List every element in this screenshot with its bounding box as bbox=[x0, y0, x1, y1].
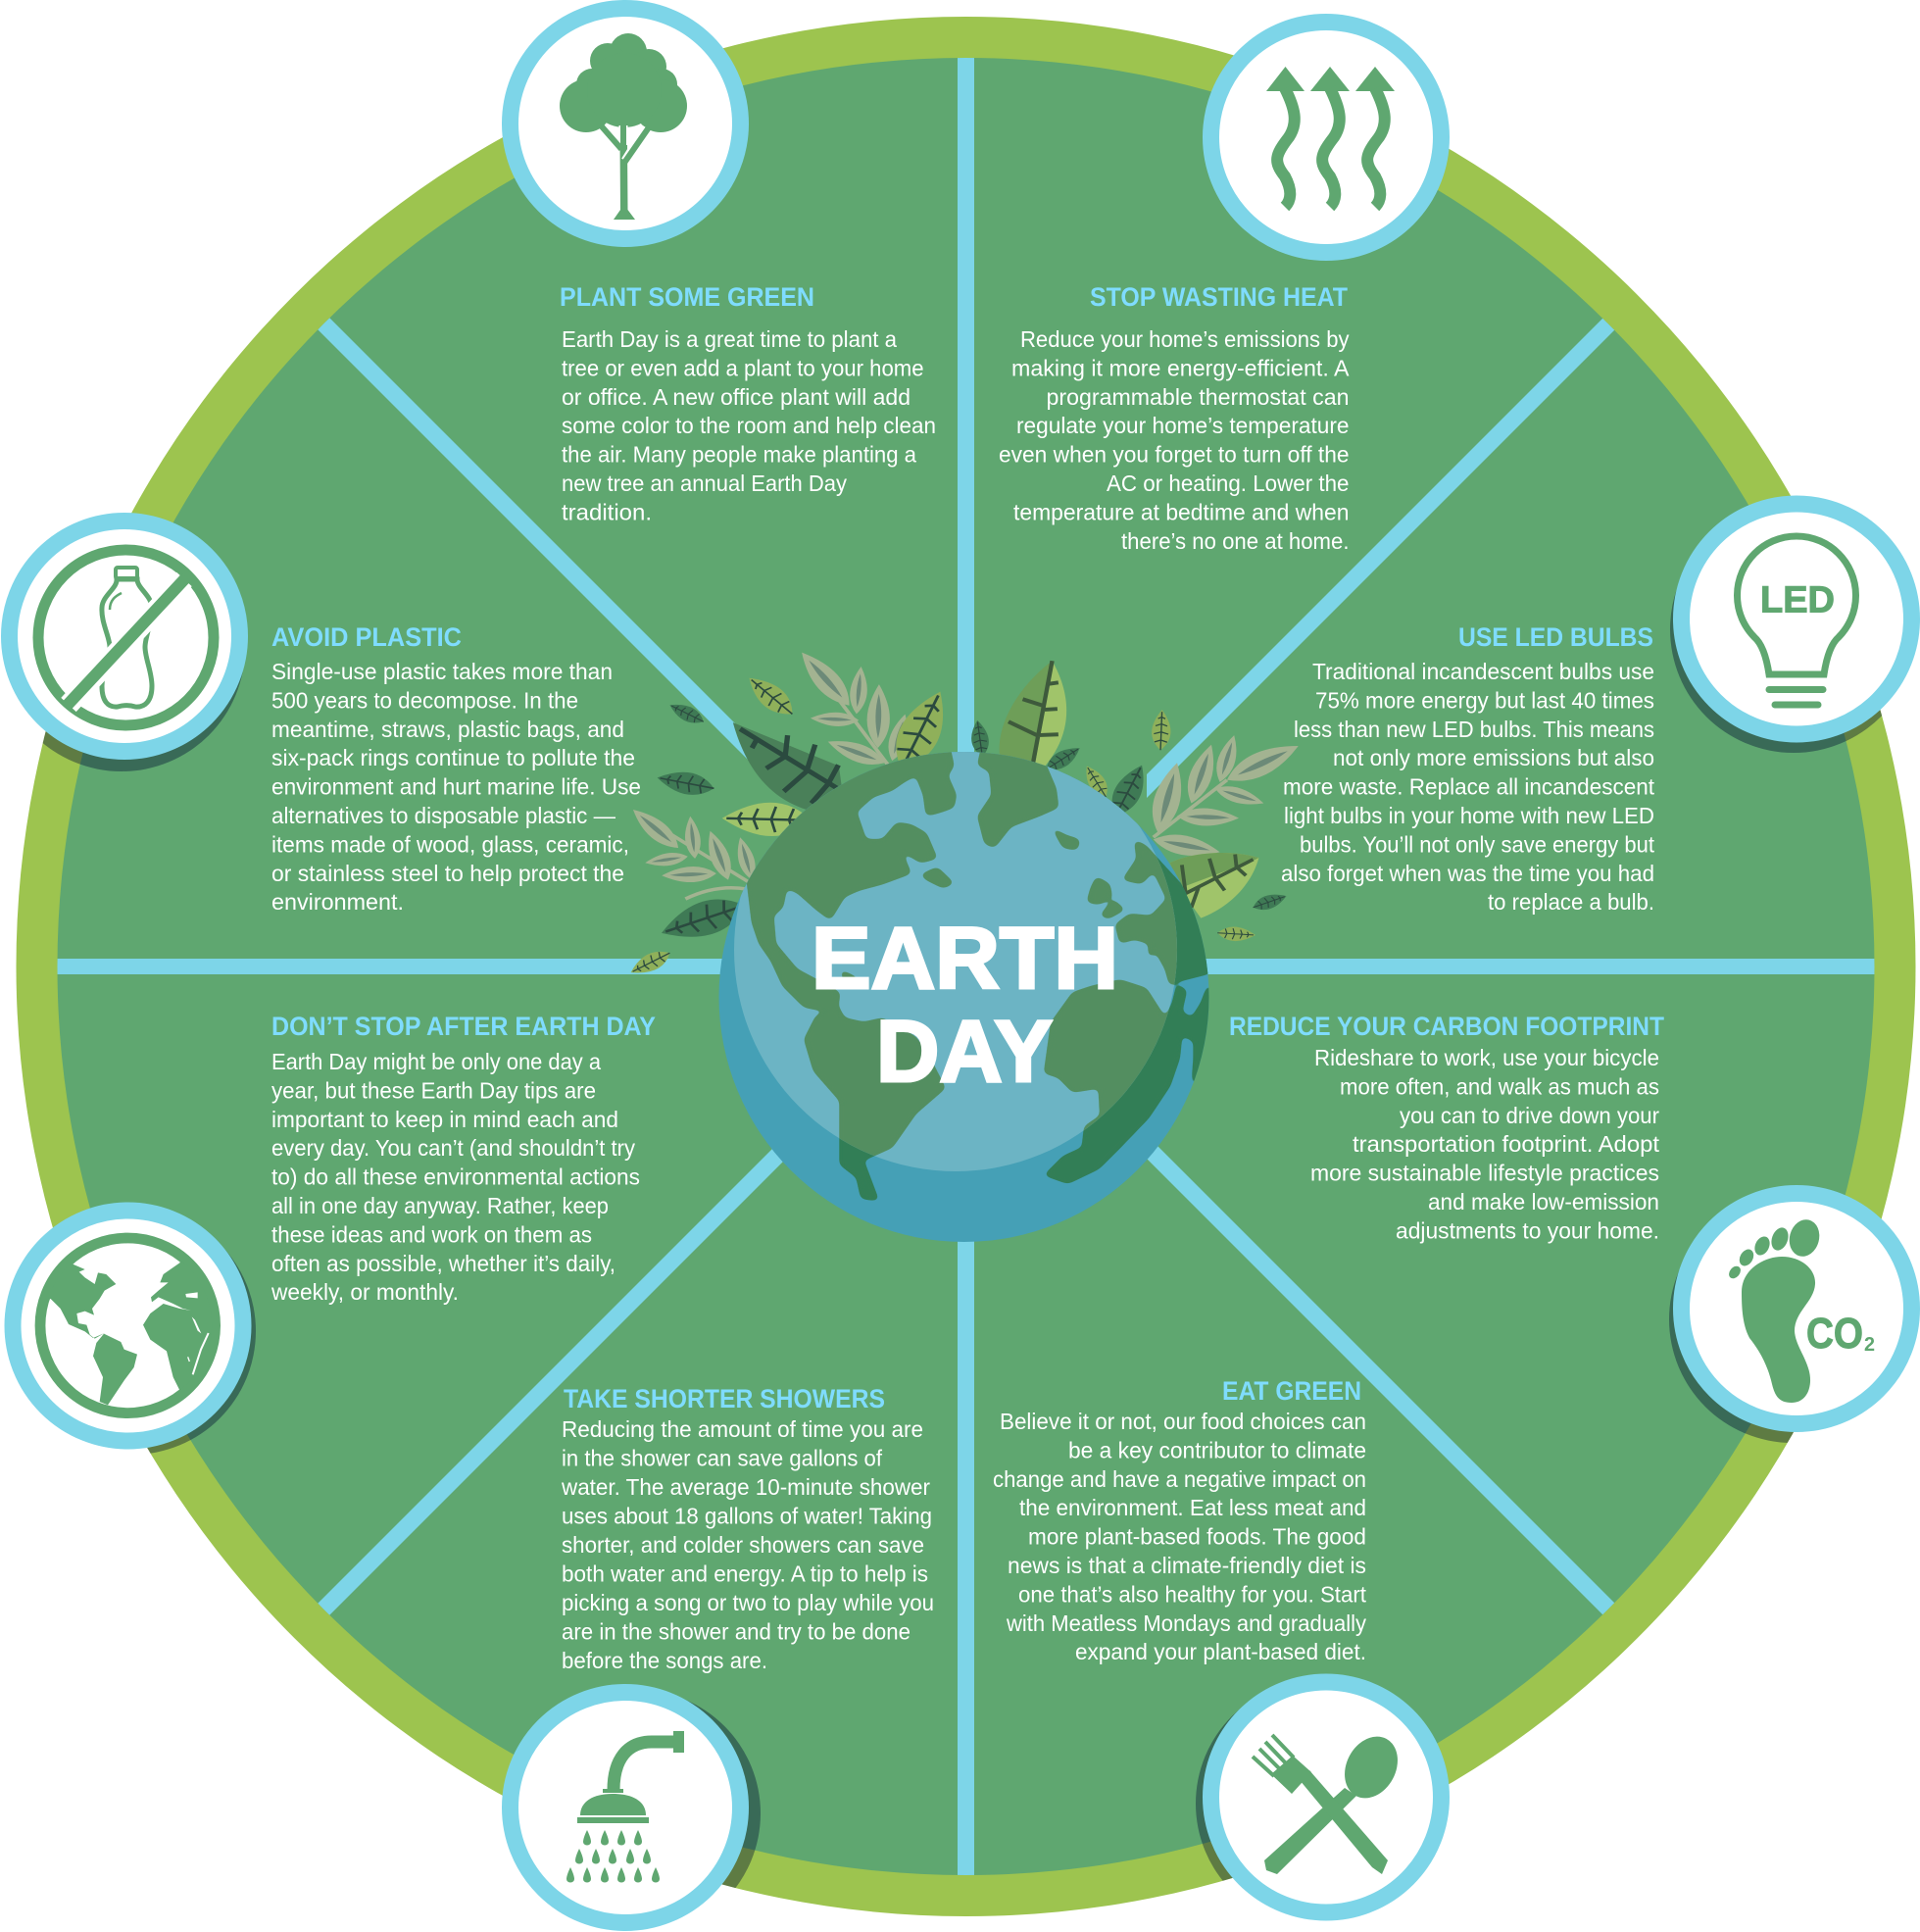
body text: new tree an annual Earth Day bbox=[562, 471, 847, 496]
panel: eat green bbox=[993, 1376, 1367, 1664]
body text: the air. Many people make planting a bbox=[562, 442, 916, 468]
body text: regulate your home’s temperature bbox=[1016, 413, 1349, 438]
icon: CO2 footprint: CO bbox=[1806, 1310, 1863, 1358]
body text: there’s no one at home. bbox=[1121, 528, 1349, 554]
body text bbox=[271, 659, 641, 915]
body text: Traditional incandescent bulbs use bbox=[1312, 659, 1654, 684]
body text: also forget when was the time you had bbox=[1281, 861, 1654, 886]
heading: DON’T STOP AFTER EARTH DAY bbox=[271, 1012, 656, 1041]
body text: Reducing the amount of time you are bbox=[562, 1416, 923, 1442]
light upper hemisphere bbox=[734, 752, 1177, 1171]
body text: more sustainable lifestyle practices bbox=[1310, 1161, 1659, 1186]
panel: reduce your carbon footprint bbox=[1229, 1012, 1664, 1243]
body text: AC or heating. Lower the bbox=[1107, 471, 1349, 496]
title: EARTH DAY: DAY bbox=[876, 1002, 1053, 1100]
icon: no plastic bottle bbox=[10, 521, 239, 751]
leaf branch: lower left bbox=[626, 803, 760, 899]
body text: alternatives to disposable plastic — bbox=[271, 803, 615, 828]
africa and eurasia bbox=[143, 1263, 210, 1390]
body text: every day. You can’t (and shouldn’t try bbox=[271, 1135, 635, 1161]
body text: even when you forget to turn off the bbox=[999, 442, 1349, 468]
body text: programmable thermostat can bbox=[1047, 384, 1349, 410]
leaves behind the globe bbox=[626, 646, 1305, 980]
body text: Rideshare to work, use your bicycle bbox=[1314, 1045, 1659, 1070]
icon: rising heat arrows bbox=[1211, 22, 1441, 253]
body text: in the shower can save gallons of bbox=[562, 1445, 883, 1470]
americas bbox=[50, 1264, 116, 1339]
body text: all in one day anyway. Rather, keep bbox=[271, 1193, 609, 1218]
heading: EAT GREEN bbox=[1222, 1376, 1361, 1406]
body text: uses about 18 gallons of water! Taking bbox=[562, 1504, 932, 1529]
body text: bulbs. You’ll not only save energy but bbox=[1300, 831, 1655, 857]
body text: to replace a bulb. bbox=[1488, 889, 1654, 915]
body text: not only more emissions but also bbox=[1333, 745, 1654, 770]
body text: picking a song or two to play while you bbox=[562, 1590, 934, 1615]
leaf branch: right bbox=[1146, 733, 1305, 862]
body text: these ideas and work on them as bbox=[271, 1221, 592, 1247]
body text: and make low-emission bbox=[1428, 1189, 1659, 1214]
body text: be a key contributor to climate bbox=[1068, 1437, 1366, 1462]
body text: tree or even add a plant to your home bbox=[562, 355, 924, 380]
central earth globe bbox=[715, 725, 1220, 1242]
icon: LED bulb: LED bbox=[1760, 580, 1835, 621]
title: EARTH DAY: EARTH bbox=[812, 909, 1118, 1007]
panel: plant some green bbox=[560, 282, 936, 524]
body text: with Meatless Mondays and gradually bbox=[1006, 1610, 1366, 1636]
body text: before the songs are. bbox=[562, 1648, 767, 1673]
body text: environment. bbox=[271, 889, 404, 915]
body text: year, but these Earth Day tips are bbox=[271, 1077, 596, 1103]
body text: adjustments to your home. bbox=[1396, 1217, 1659, 1243]
body text: 75% more energy but last 40 times bbox=[1315, 687, 1654, 713]
body text: light bulbs in your home with new LED bbox=[1284, 803, 1654, 828]
body text: one that’s also healthy for you. Start bbox=[1018, 1581, 1367, 1607]
panel: avoid plastic bbox=[271, 622, 641, 915]
body text: important to keep in mind each and bbox=[271, 1107, 618, 1132]
body text: the environment. Eat less meat and bbox=[1019, 1495, 1366, 1520]
heading: AVOID PLASTIC bbox=[271, 622, 462, 652]
body text: news is that a climate-friendly diet is bbox=[1008, 1553, 1366, 1578]
body text bbox=[999, 326, 1350, 554]
panel: take shorter showers bbox=[561, 1384, 934, 1673]
body text: items made of wood, glass, ceramic, bbox=[271, 831, 629, 857]
body text: are in the shower and try to be done bbox=[562, 1619, 911, 1645]
icon: fork and spoon bbox=[1211, 1682, 1441, 1912]
heading: STOP WASTING HEAT bbox=[1090, 282, 1348, 312]
body text: environment and hurt marine life. Use bbox=[271, 774, 641, 800]
body text bbox=[993, 1409, 1367, 1664]
icon: world globe bbox=[13, 1211, 243, 1441]
body text: meantime, straws, plastic bags, and bbox=[271, 717, 624, 742]
icon: CO2 footprint: 2 bbox=[1864, 1334, 1875, 1356]
body text: 500 years to decompose. In the bbox=[271, 687, 578, 713]
body text: weekly, or monthly. bbox=[271, 1279, 459, 1305]
body text bbox=[1310, 1045, 1660, 1243]
body text: tradition. bbox=[562, 499, 652, 524]
heading: USE LED BULBS bbox=[1458, 622, 1653, 652]
body text: less than new LED bulbs. This means bbox=[1294, 717, 1654, 742]
panel: use LED bulbs bbox=[1281, 622, 1655, 915]
body text bbox=[561, 1416, 934, 1673]
body text: you can to drive down your bbox=[1400, 1103, 1659, 1128]
body text: making it more energy-efficient. A bbox=[1011, 355, 1350, 380]
panel: don't stop after earth day bbox=[271, 1012, 656, 1305]
title: EARTH DAY bbox=[812, 909, 1118, 1100]
body text: some color to the room and help clean bbox=[562, 413, 936, 438]
heading: REDUCE YOUR CARBON FOOTPRINT bbox=[1229, 1012, 1664, 1041]
body text: more waste. Replace all incandescent bbox=[1283, 774, 1655, 800]
body text: both water and energy. A tip to help is bbox=[562, 1560, 928, 1586]
body text: Reduce your home’s emissions by bbox=[1020, 326, 1350, 352]
body text: or stainless steel to help protect the bbox=[271, 861, 624, 886]
small veined leaves bbox=[626, 669, 1289, 980]
body text: more often, and walk as much as bbox=[1340, 1073, 1659, 1099]
body text: more plant-based foods. The good bbox=[1028, 1524, 1366, 1550]
body text: Earth Day might be only one day a bbox=[271, 1049, 601, 1074]
body text: Believe it or not, our food choices can bbox=[1000, 1409, 1366, 1434]
body text: temperature at bedtime and when bbox=[1013, 499, 1349, 524]
body text: water. The average 10-minute shower bbox=[561, 1474, 930, 1500]
icon: CO2 footprint bbox=[1682, 1194, 1911, 1423]
body text: transportation footprint. Adopt bbox=[1353, 1131, 1660, 1157]
heading: TAKE SHORTER SHOWERS bbox=[564, 1384, 885, 1413]
body text: six-pack rings continue to pollute the bbox=[271, 745, 635, 770]
panel: stop wasting heat bbox=[999, 282, 1350, 554]
continents on dark ocean bbox=[745, 744, 1220, 1201]
body text: expand your plant-based diet. bbox=[1075, 1639, 1366, 1664]
icon: shower head bbox=[510, 1692, 741, 1923]
heading: PLANT SOME GREEN bbox=[560, 282, 814, 312]
body text bbox=[562, 326, 936, 524]
body text: Earth Day is a great time to plant a bbox=[562, 326, 897, 352]
body text: to) do all these environmental actions bbox=[271, 1164, 640, 1190]
body text: shorter, and colder showers can save bbox=[562, 1532, 924, 1558]
body text bbox=[271, 1049, 640, 1305]
large lime leaf, right bbox=[1170, 853, 1258, 918]
body text: Single-use plastic takes more than bbox=[271, 659, 613, 684]
icon: tree bbox=[510, 8, 741, 239]
large two-tone leaf, top bbox=[1000, 661, 1066, 768]
body text: often as possible, whether it’s daily, bbox=[271, 1251, 615, 1276]
body text bbox=[1281, 659, 1655, 915]
icon shadows bbox=[43, 589, 1882, 1888]
large dark leaf, upper left bbox=[733, 722, 842, 810]
leaf branch: upper left bbox=[792, 646, 913, 771]
body text: change and have a negative impact on bbox=[993, 1466, 1366, 1492]
icon: LED bulb bbox=[1682, 504, 1911, 734]
body text: or office. A new office plant will add bbox=[562, 384, 911, 410]
